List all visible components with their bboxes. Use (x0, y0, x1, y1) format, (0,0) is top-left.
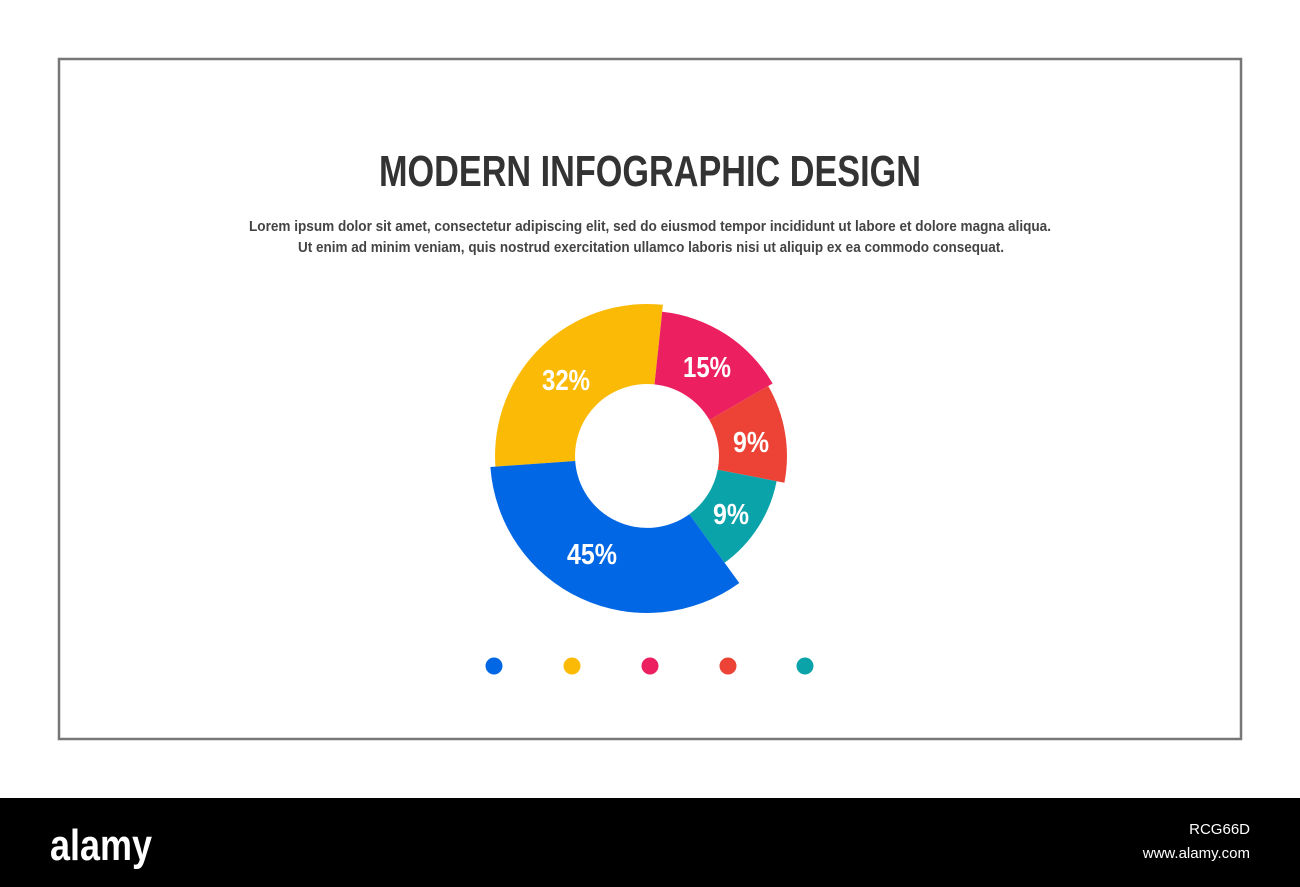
percentage labels: 32% (542, 365, 590, 397)
footer logo: alamy (50, 821, 152, 870)
footer id text: RCG66D (1189, 821, 1250, 838)
segment: red 9% (709, 386, 787, 483)
footer bar (0, 798, 1300, 887)
percentage labels (542, 352, 769, 571)
segment: teal 9% (689, 470, 777, 563)
segment: blue 45% (490, 461, 739, 613)
percentage labels: 9% (713, 499, 749, 531)
subtitle text: Lorem ipsum dolor sit amet, consectetur adipiscing elit, sed do eiusmod tempor incididunt ut labore et dolore magna aliqua. (249, 218, 1051, 235)
subtitle text: Ut enim ad minim veniam, quis nostrud exercitation ullamco laboris nisi ut aliquip ex ea commodo consequat. (298, 239, 1004, 256)
title: MODERN INFOGRAPHIC DESIGN (379, 147, 921, 196)
subtitle text (249, 218, 1051, 256)
frame (59, 59, 1241, 739)
legend dots (486, 658, 814, 674)
percentage labels: 15% (683, 352, 731, 384)
footer bar: www.alamy.com (1142, 845, 1250, 862)
percentage labels: 9% (733, 427, 769, 459)
segment: yellow 32% (495, 304, 663, 467)
percentage labels: 45% (567, 539, 617, 571)
segment: pink 15% (654, 312, 773, 420)
donut chart (490, 304, 787, 613)
